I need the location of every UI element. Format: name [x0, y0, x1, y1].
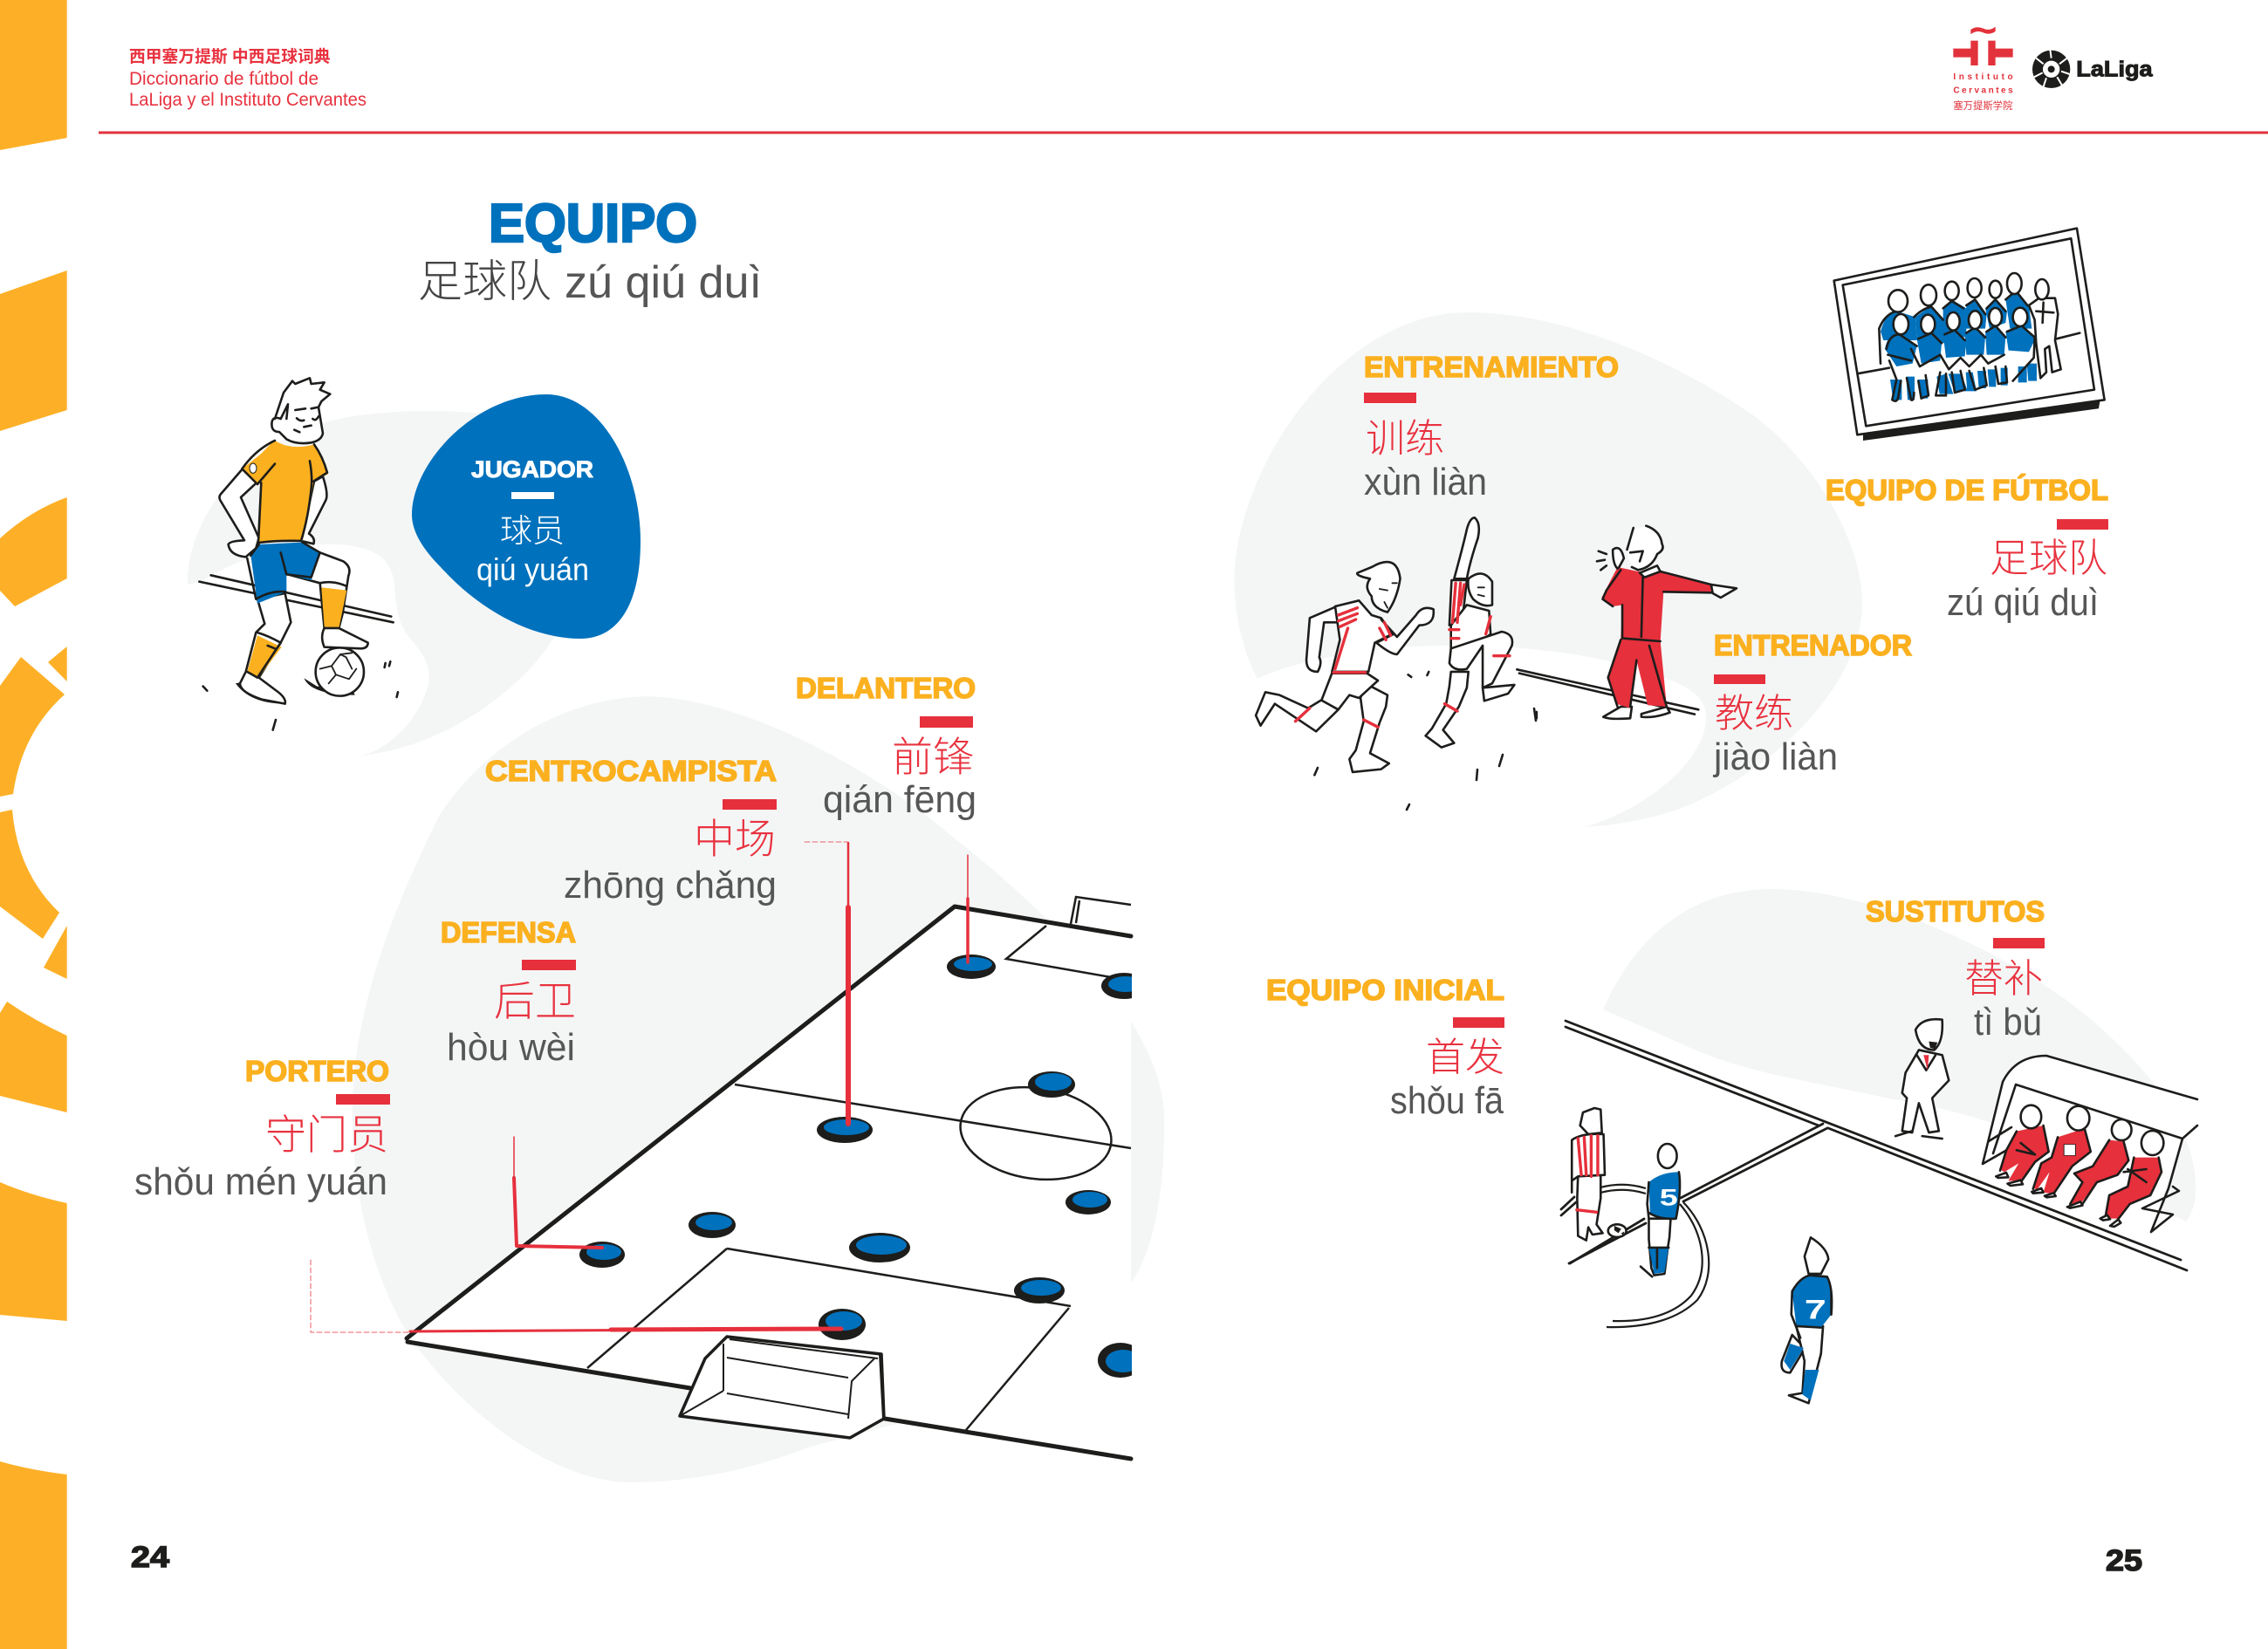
ball — [1608, 1224, 1627, 1237]
label: portero: shǒu mén yuán — [134, 1160, 387, 1203]
label: centrocampista: zhōng chǎng — [564, 864, 777, 907]
label: entrenamiento — [1364, 351, 1619, 503]
label: equipo de fútbol: EQUIPO DE FÚTBOL — [1826, 474, 2108, 506]
label: entrenamiento: ENTRENAMIENTO — [1364, 351, 1619, 383]
illustration: team photo — [1834, 229, 2105, 441]
label: entrenador: 教练 — [1715, 681, 1793, 738]
illustration: players on the pitch — [1572, 1108, 1832, 1403]
label: equipo inicial — [1266, 974, 1504, 1122]
logo: Instituto Cervantes: Instituto — [1953, 72, 2013, 82]
label: centrocampista — [485, 755, 777, 907]
background blob: substitutes — [1603, 889, 2196, 1221]
label: defensa: 后卫 — [494, 968, 576, 1028]
logo: Instituto Cervantes — [1953, 27, 2013, 112]
substitute 3 — [2067, 1119, 2132, 1208]
coach — [1597, 526, 1737, 719]
player number 7 — [1782, 1237, 1832, 1403]
header rule — [99, 131, 2268, 134]
decorative left band — [0, 0, 67, 1649]
illustration: training runners and coach — [1256, 517, 1737, 775]
title: zú qiú duì — [565, 257, 762, 308]
label: portero: 守门员 — [265, 1101, 388, 1161]
label: defensa: hòu wèi — [447, 1026, 575, 1069]
label: portero: PORTERO — [245, 1055, 389, 1087]
label: entrenamiento: xùn liàn — [1364, 461, 1487, 503]
label: equipo de fútbol — [1826, 474, 2108, 624]
blue callout: jugador — [412, 394, 641, 639]
goal — [680, 1337, 884, 1438]
header text: LaLiga y el Instituto Cervantes — [129, 90, 367, 110]
player number 5: 5 — [1660, 1184, 1678, 1210]
substitute 4 — [2100, 1131, 2163, 1227]
illustration: bench shelter — [1983, 1056, 2197, 1232]
label: equipo de fútbol: 足球队 — [1990, 526, 2107, 583]
header text: Diccionario de fútbol de — [129, 69, 319, 89]
header text — [129, 46, 367, 110]
pitch with player positions — [406, 897, 1147, 1459]
substitute 1 — [1996, 1105, 2049, 1186]
label: sustitutos — [1866, 895, 2045, 1043]
label: equipo inicial: shǒu fā — [1390, 1079, 1504, 1122]
player number 5 — [1641, 1144, 1680, 1276]
logo: LaLiga — [2032, 50, 2153, 88]
red striped player — [1572, 1108, 1605, 1241]
label: centrocampista: 中场 — [694, 805, 776, 866]
header text: 西甲塞万提斯 中西足球词典 — [129, 46, 331, 65]
label: entrenador: jiào liàn — [1712, 736, 1838, 778]
blue callout: jugador: JUGADOR — [471, 456, 593, 482]
logo: LaLiga: LaLiga — [2076, 58, 2153, 81]
page number 25: 25 — [2106, 1544, 2142, 1577]
label: delantero: 前锋 — [892, 723, 974, 783]
title: EQUIPO — [489, 194, 697, 254]
pitch lines: bench side — [1561, 1021, 2187, 1327]
page number 24: 24 — [131, 1541, 169, 1574]
label: entrenamiento: 训练 — [1366, 407, 1444, 463]
blue callout: jugador: 球员 — [500, 513, 565, 549]
runner — [1256, 562, 1434, 772]
small pitch ticks — [1407, 708, 1536, 810]
pitch line — [1517, 669, 1698, 715]
blue callout: jugador: qiú yuán — [476, 551, 589, 587]
label: centrocampista: CENTROCAMPISTA — [485, 755, 777, 787]
logo: Instituto Cervantes: Cervantes — [1953, 86, 2013, 96]
background blob: training — [1234, 312, 1862, 827]
label: sustitutos: 替补 — [1964, 947, 2043, 1003]
label: delantero: DELANTERO — [796, 672, 976, 704]
player number 7: 7 — [1805, 1295, 1826, 1325]
label: defensa — [441, 916, 576, 1069]
illustration: manager in suit — [1895, 1019, 1949, 1139]
title: 足球队 — [418, 245, 552, 310]
red leader lines — [311, 842, 968, 1332]
logo: Instituto Cervantes: 塞万提斯学院 — [1953, 99, 2012, 112]
background blob: pitch — [353, 696, 1164, 1482]
label: portero — [134, 1055, 390, 1203]
label: equipo inicial: EQUIPO INICIAL — [1266, 974, 1504, 1006]
label: sustitutos: tì bǔ — [1974, 1001, 2042, 1043]
background blob: player — [188, 411, 567, 756]
substitute 2 — [2032, 1106, 2091, 1197]
label: delantero: qián fēng — [823, 778, 976, 821]
label: entrenador — [1712, 629, 1912, 778]
label: sustitutos: SUSTITUTOS — [1866, 895, 2045, 927]
label: delantero — [796, 672, 976, 821]
label: equipo inicial: 首发 — [1426, 1025, 1504, 1082]
jumping player — [1426, 517, 1514, 748]
label: equipo de fútbol: zú qiú duì — [1947, 581, 2099, 624]
illustration: substitutes on bench — [1996, 1105, 2163, 1227]
title — [418, 194, 762, 310]
label: defensa: DEFENSA — [441, 916, 576, 948]
label: entrenador: ENTRENADOR — [1714, 629, 1912, 661]
illustration: player with ball — [199, 378, 398, 730]
